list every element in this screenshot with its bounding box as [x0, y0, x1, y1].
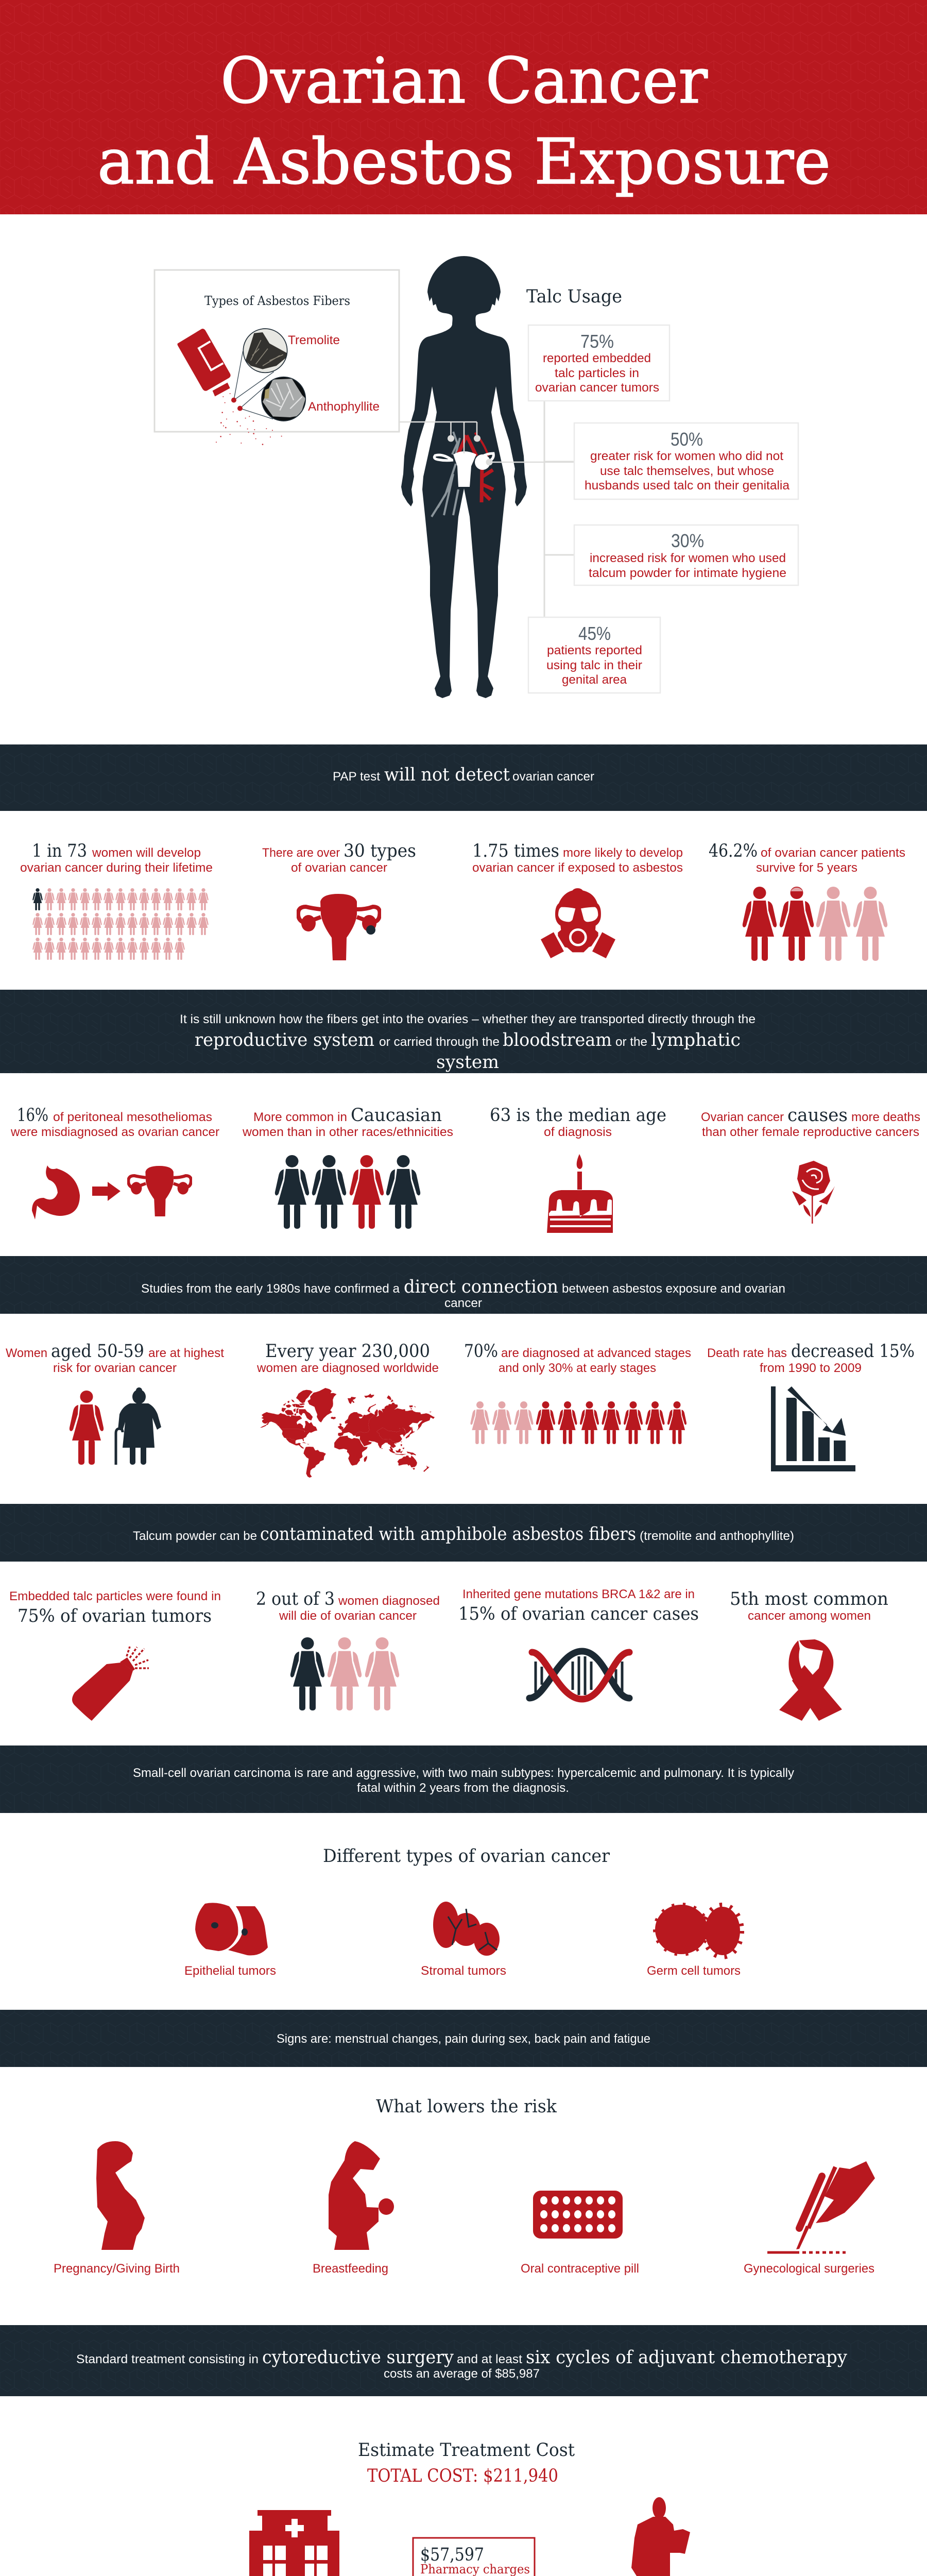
icon: 43 women pictogram	[32, 888, 209, 960]
callout: 30%	[574, 525, 798, 585]
callout: 50%: greater risk for women who did not	[590, 449, 783, 463]
stat: every year 230,000	[256, 1341, 439, 1375]
lymph vessels	[432, 432, 460, 517]
icon: three women	[290, 1637, 399, 1710]
band: small-cell carcinoma	[0, 1745, 927, 1813]
stat: 46.2%: 46.2%	[709, 841, 758, 861]
band: fibers route: or the	[615, 1035, 647, 1049]
panel: types of asbestos fibers: Tremolite	[288, 333, 340, 347]
band: fibers route: or carried through the	[379, 1035, 500, 1049]
stat: BRCA: 15% of ovarian cancer cases	[458, 1604, 699, 1624]
stat: 30 types: 30 types	[344, 841, 416, 861]
icon and label: epithelial tumors	[184, 1903, 276, 1978]
panel: types of asbestos fibers: Anthophyllite	[308, 400, 380, 414]
callout: 75%: 75%	[580, 331, 614, 352]
stat: 5th most common: 5th most common	[730, 1589, 888, 1609]
band: standard treatment: cytoreductive surgery	[262, 2347, 454, 2368]
icon and label: stromal tumors: Stromal tumors	[421, 1964, 506, 1978]
stat: causes more deaths: more deaths	[851, 1110, 920, 1124]
stat: 16%: 16%	[17, 1105, 48, 1126]
icon and label: germ cell tumors: Germ cell tumors	[647, 1964, 741, 1978]
stat: causes more deaths: than other female reproductive cancers	[702, 1125, 919, 1139]
stat: 75% tumors	[9, 1589, 221, 1626]
band: direct connection: cancer	[444, 1296, 482, 1310]
icon: world map	[260, 1388, 435, 1478]
stat: 2 out of 3	[256, 1589, 440, 1623]
icon: birthday cake	[547, 1154, 613, 1233]
title banner	[0, 0, 927, 214]
icon: woman and elder	[70, 1387, 161, 1465]
band: contaminated: Talcum powder can be	[133, 1529, 257, 1543]
band: standard treatment: costs an average of $85,987	[384, 2367, 540, 2381]
heading: estimate treatment cost: TOTAL COST: $211,940	[367, 2466, 558, 2486]
icon and label: oral contraceptive pill	[521, 2191, 639, 2276]
callout: 50%: husbands used talc on their genitalia	[585, 479, 790, 493]
panel: types of asbestos fibers	[154, 270, 399, 445]
icon and label: germ cell tumors	[647, 1905, 742, 1978]
band: direct connection: between asbestos exposure and ovarian	[562, 1282, 785, 1296]
heading: estimate treatment cost: Estimate Treatment Cost	[358, 2440, 575, 2461]
stat: 5th most common: cancer among women	[748, 1609, 871, 1623]
icon: talc bottle spray	[72, 1647, 149, 1721]
stat: 1 in 73: ovarian cancer during their lifetime	[20, 861, 213, 875]
stat: causes more deaths	[701, 1105, 920, 1139]
stat: death rate: Death rate has	[707, 1346, 787, 1360]
band: standard treatment	[0, 2325, 927, 2396]
callout: 75%: talc particles in	[555, 366, 639, 380]
icon and label: pregnancy	[54, 2141, 180, 2276]
stat: 1.75 times	[472, 841, 683, 875]
stat: 16%: were misdiagnosed as ovarian cancer	[10, 1125, 219, 1139]
band: signs	[0, 2010, 927, 2067]
title banner: Ovarian Cancer	[220, 44, 708, 117]
icon and label: gynecological surgeries	[744, 2161, 875, 2276]
icon: ten women	[470, 1401, 686, 1444]
band: small-cell carcinoma: fatal within 2 years from the diagnosis.	[357, 1781, 569, 1795]
stat: 1 in 73: 1 in 73	[32, 841, 87, 861]
stat: 5th most common	[730, 1589, 888, 1623]
band: standard treatment: Standard treatment consisting in	[76, 2352, 259, 2366]
icon: uterus with tumor	[298, 894, 380, 960]
stat: aged 50-59: Women	[6, 1346, 47, 1360]
heading: what lowers the risk: What lowers the risk	[376, 2096, 557, 2117]
stat: 1.75 times: ovarian cancer if exposed to asbestos	[472, 861, 683, 875]
stat: 75% tumors: Embedded talc particles were found in	[9, 1589, 221, 1603]
stat: aged 50-59: aged 50-59	[51, 1341, 144, 1362]
callout: 45%	[528, 617, 660, 693]
stat: median age: 63 is the median age	[490, 1105, 666, 1126]
stat: death rate	[707, 1341, 915, 1375]
stat: aged 50-59: risk for ovarian cancer	[53, 1361, 177, 1375]
stat: death rate: decreased 15%	[791, 1341, 915, 1362]
icon and label: epithelial tumors: Epithelial tumors	[184, 1964, 276, 1978]
title banner: and Asbestos Exposure	[97, 125, 831, 198]
stat: 2 out of 3: women diagnosed	[338, 1594, 440, 1608]
stat: 70% diagnosed: are diagnosed at advanced stages	[501, 1346, 691, 1360]
icon: four women, one red	[275, 1155, 420, 1229]
icon: hospital	[234, 2510, 355, 2576]
panel: types of asbestos fibers: Types of Asbestos Fibers	[204, 294, 350, 308]
band: fibers route: system	[436, 1052, 499, 1073]
stat: Caucasian	[242, 1105, 453, 1139]
band: fibers route: It is still unknown how the fibers get into the ovaries – whether they are transported directly through the	[180, 1012, 756, 1026]
band: PAP test	[0, 744, 927, 811]
band: PAP test: will not detect	[384, 765, 510, 785]
icon and label: pregnancy: Pregnancy/Giving Birth	[54, 2262, 180, 2276]
callout: 50%: use talc themselves, but whose	[600, 464, 774, 478]
stat: aged 50-59	[6, 1341, 224, 1375]
heading: talc usage: Talc Usage	[526, 286, 622, 307]
callout: 45%: using talc in their	[546, 658, 642, 672]
band: PAP test: PAP test	[333, 770, 380, 784]
stat: median age: of diagnosis	[544, 1125, 612, 1139]
icon: four women survival	[743, 887, 887, 961]
callout: pharmacy charges: $57,597	[420, 2545, 484, 2565]
stat: BRCA	[458, 1587, 699, 1624]
stat: death rate: from 1990 to 2009	[760, 1361, 862, 1375]
icon: stomach to uterus	[32, 1165, 191, 1219]
stat: causes more deaths: causes	[787, 1105, 848, 1126]
band: fibers route: bloodstream	[503, 1030, 612, 1050]
band: PAP test: ovarian cancer	[512, 770, 594, 784]
icon: rose	[792, 1161, 835, 1224]
callout: pharmacy charges	[413, 2538, 535, 2576]
blood vessels	[458, 433, 493, 502]
band: contaminated: contaminated with amphibole asbestos fibers	[260, 1524, 636, 1545]
callout: 75%: ovarian cancer tumors	[535, 381, 659, 395]
callout: 30%: increased risk for women who used	[590, 551, 786, 565]
stat: 16%: of peritoneal mesotheliomas	[53, 1110, 212, 1124]
callout: 30%: talcum powder for intimate hygiene	[589, 566, 786, 580]
stat: 16%	[10, 1105, 219, 1139]
band: signs: Signs are: menstrual changes, pain during sex, back pain and fatigue	[277, 2032, 650, 2046]
band: contaminated: (tremolite and anthophyllite)	[640, 1529, 794, 1543]
stat: 30 types	[262, 841, 416, 875]
band: fibers route: lymphatic	[651, 1030, 741, 1050]
callout: 45%: patients reported	[547, 643, 642, 657]
stat: 1 in 73: women will develop	[92, 846, 201, 860]
icon: physician	[631, 2497, 690, 2576]
stat: 46.2%: survive for 5 years	[756, 861, 857, 875]
stat: 2 out of 3: 2 out of 3	[256, 1589, 335, 1609]
stat: Caucasian: Caucasian	[351, 1105, 442, 1126]
stat: 30 types: of ovarian cancer	[291, 861, 387, 875]
icon and label: oral contraceptive pill: Oral contraceptive pill	[521, 2262, 639, 2276]
callout: 50%	[574, 423, 798, 499]
stat: aged 50-59: are at highest	[148, 1346, 224, 1360]
talc connector lines	[544, 401, 574, 617]
uterus	[434, 451, 493, 487]
stat: 1.75 times: more likely to develop	[563, 846, 683, 860]
callout: 45%: genital area	[562, 673, 627, 687]
stat: 1.75 times: 1.75 times	[472, 841, 559, 861]
icon: awareness ribbon	[779, 1639, 842, 1721]
body silhouette	[399, 256, 574, 698]
stat: 70% diagnosed: 70%	[464, 1341, 498, 1362]
stat: 70% diagnosed: and only 30% at early stages	[499, 1361, 656, 1375]
stat: 70% diagnosed	[464, 1341, 691, 1375]
band: direct connection	[0, 1256, 927, 1314]
callout: 75%: reported embedded	[543, 351, 651, 365]
heading: estimate treatment cost	[358, 2440, 575, 2486]
icon: declining bar chart	[771, 1386, 855, 1471]
stat: 75% tumors: 75% of ovarian tumors	[18, 1606, 212, 1626]
stat: 46.2%: of ovarian cancer patients	[761, 846, 905, 860]
stat: 2 out of 3: will die of ovarian cancer	[279, 1609, 417, 1623]
stat: Caucasian: women than in other races/ethnicities	[242, 1125, 453, 1139]
icon and label: breastfeeding	[313, 2141, 394, 2276]
callout: 75%	[528, 325, 670, 401]
icon: gas mask	[541, 888, 615, 958]
band: standard treatment: six cycles of adjuvant chemotherapy	[526, 2347, 847, 2368]
band: contaminated	[0, 1504, 927, 1562]
callout: 30%: 30%	[671, 530, 704, 551]
stat: every year 230,000: women are diagnosed worldwide	[256, 1361, 439, 1375]
band: fibers route	[0, 990, 927, 1073]
heading: different types: Different types of ovarian cancer	[323, 1846, 610, 1867]
stat: every year 230,000: Every year 230,000	[265, 1341, 430, 1362]
callout: 50%: 50%	[671, 429, 703, 450]
stat: 30 types: There are over	[262, 846, 340, 860]
icon and label: gynecological surgeries: Gynecological surgeries	[744, 2262, 874, 2276]
callout: 45%: 45%	[578, 623, 611, 644]
icon and label: breastfeeding: Breastfeeding	[313, 2262, 388, 2276]
icon and label: stromal tumors	[421, 1902, 506, 1978]
stat: 1 in 73	[20, 841, 213, 875]
stat: median age	[490, 1105, 666, 1139]
band: direct connection: direct connection	[404, 1277, 558, 1297]
stat: 46.2%	[709, 841, 905, 875]
band: fibers route: reproductive system	[195, 1030, 374, 1050]
band: direct connection: Studies from the early 1980s have confirmed a	[141, 1282, 400, 1296]
stat: BRCA: Inherited gene mutations BRCA 1&2 are in	[462, 1587, 695, 1601]
icon: DNA helix	[529, 1651, 629, 1699]
band: small-cell carcinoma: Small-cell ovarian carcinoma is rare and aggressive, with two main subtypes: hypercalcemic and pulmonary. It is typically	[133, 1766, 794, 1780]
stat: causes more deaths: Ovarian cancer	[701, 1110, 784, 1124]
band: standard treatment: and at least	[457, 2352, 522, 2366]
stat: Caucasian: More common in	[253, 1110, 347, 1124]
